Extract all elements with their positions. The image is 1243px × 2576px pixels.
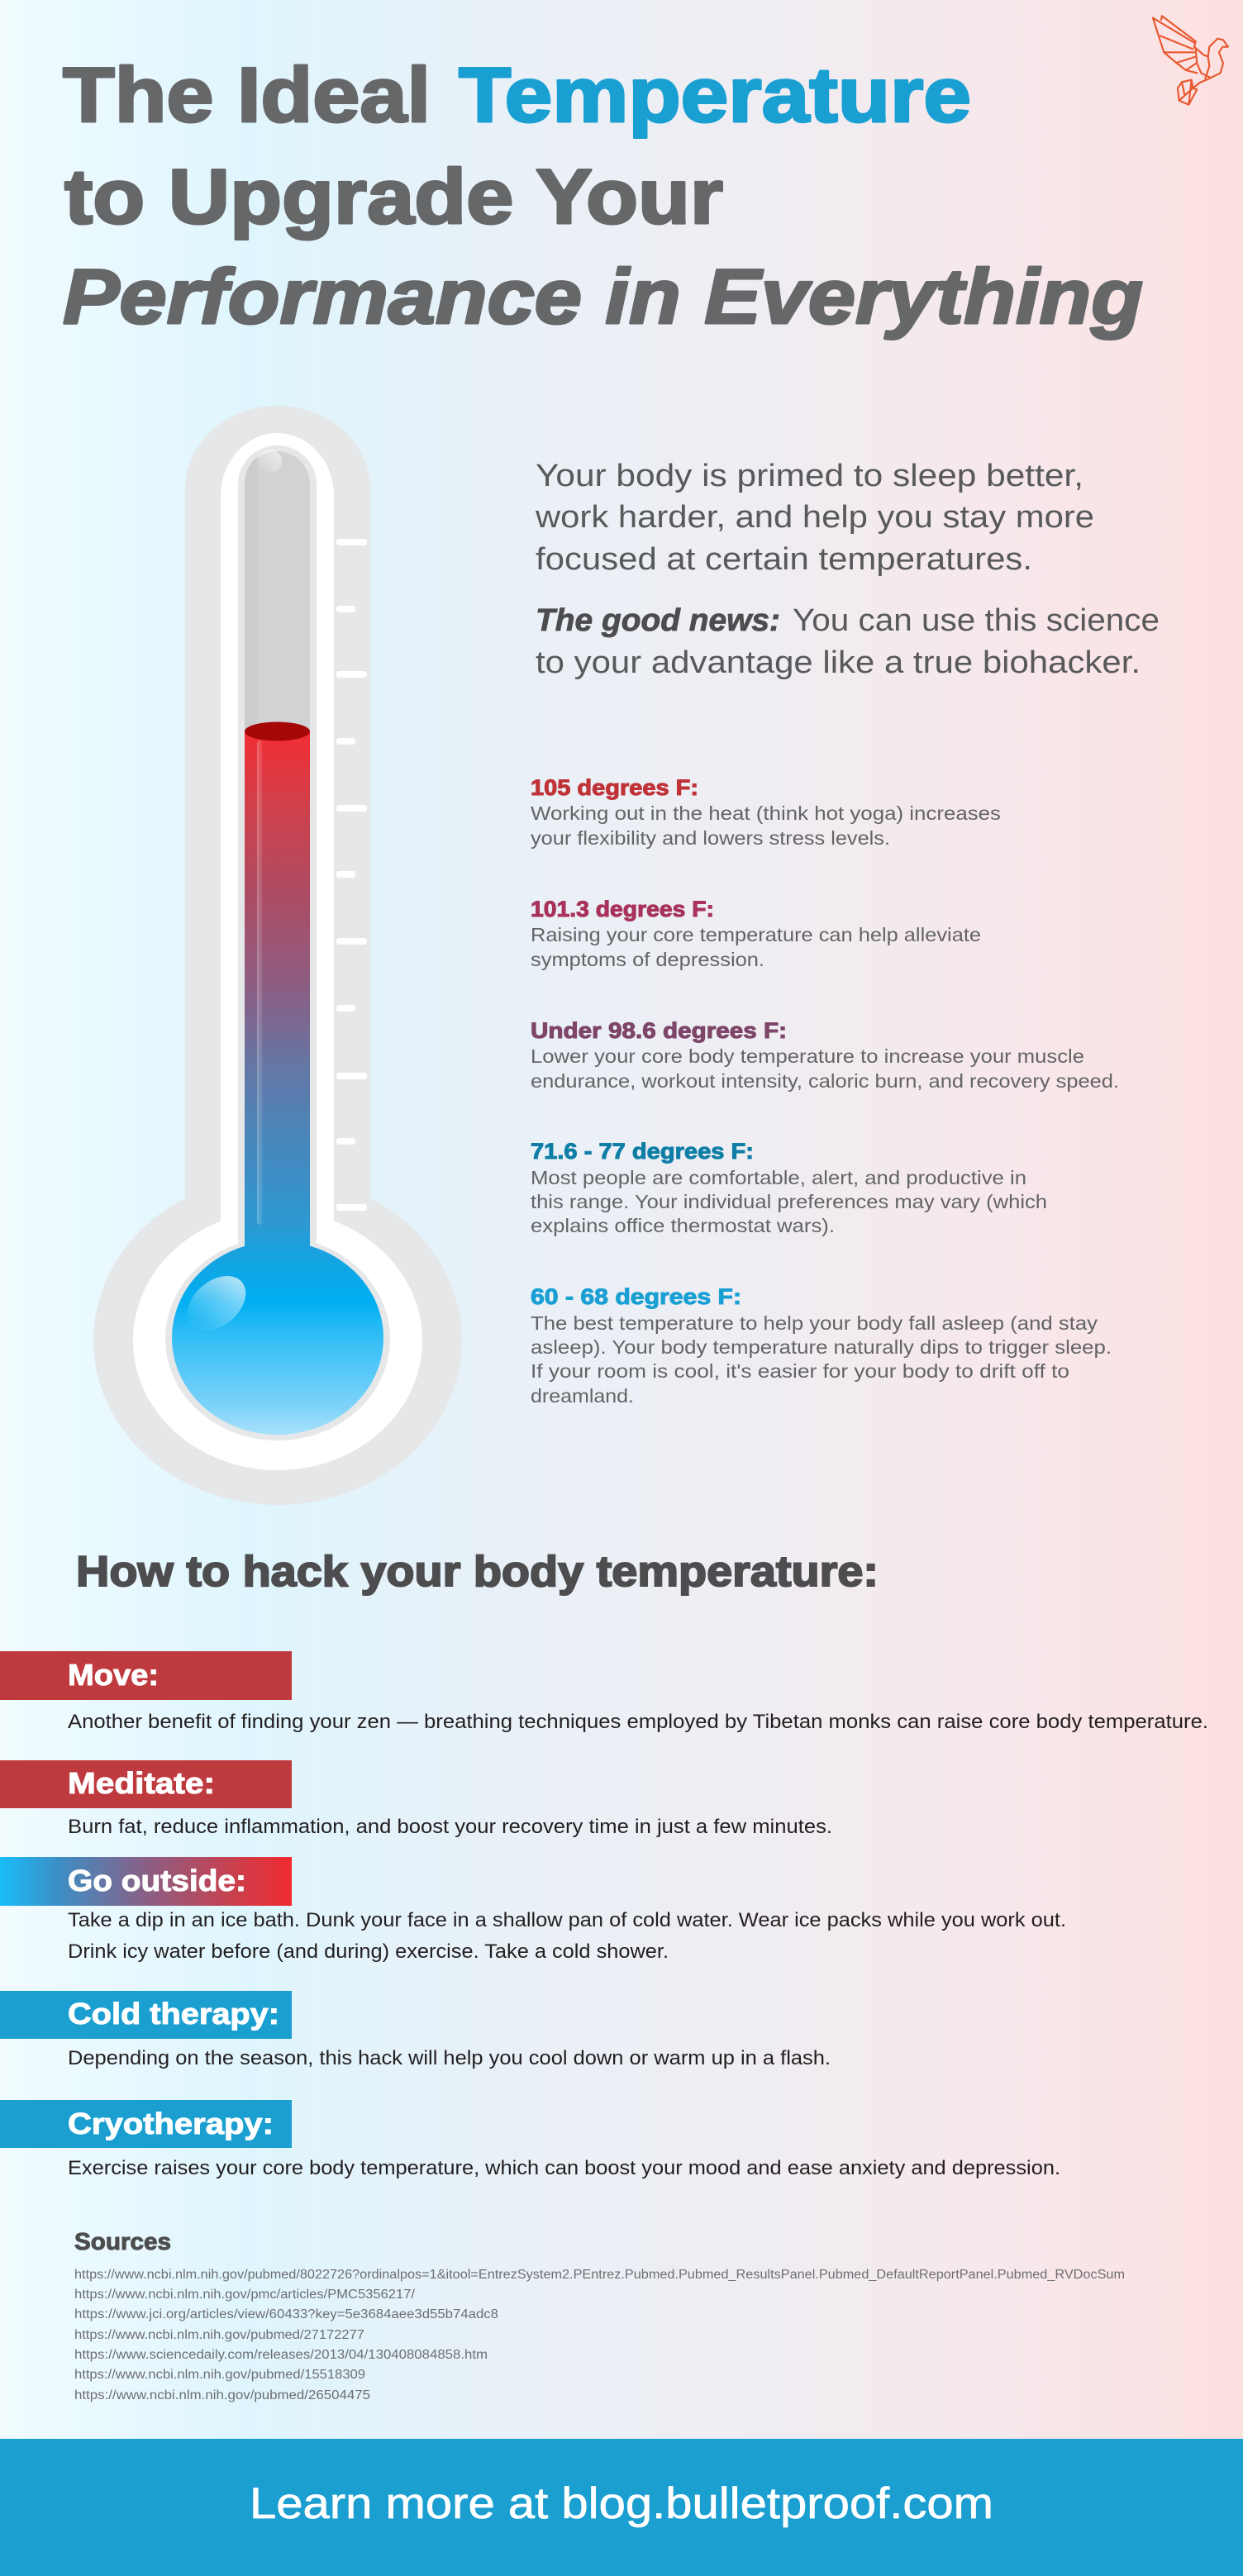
temperature entry: 105 degrees: [531, 775, 1001, 849]
title: The Ideal: [63, 51, 431, 138]
hack: meditate: [0, 1760, 832, 1838]
source links: https://www.sciencedaily.com/releases/2013/04/130408084858.htm: [74, 2348, 488, 2362]
temperature entry: 60 to 68 degrees: The best temperature to help your body fall asleep (and stay: [531, 1312, 1098, 1334]
label bar: [0, 2100, 292, 2148]
temperature entry: 60 to 68 degrees: If your room is cool, it's easier for your body to drift off to: [531, 1360, 1069, 1382]
bar label: Cryotherapy:: [68, 2107, 274, 2140]
temperature entry: 101.3 degrees: [531, 897, 981, 970]
intro text: work harder, and help you stay more: [535, 500, 1094, 535]
source links: https://www.ncbi.nlm.nih.gov/pubmed/26504475: [74, 2388, 370, 2402]
temperature entry: 71.6 to 77 degrees: 71.6 - 77 degrees F:: [531, 1139, 754, 1164]
temperature entry: 60 to 68 degrees: dreamland.: [531, 1385, 634, 1407]
hack: cold therapy: [0, 1991, 831, 2069]
glass reflection strip: [245, 457, 257, 736]
sources heading: Sources: [74, 2229, 171, 2255]
temperature entry: under 98.6 degrees: [531, 1018, 1119, 1092]
description: [68, 1909, 1066, 1963]
temperature entry: 60 to 68 degrees: [531, 1284, 1112, 1407]
intro text: [535, 459, 1160, 680]
title: Temperature: [459, 51, 971, 138]
outer grey casing: [93, 406, 462, 1505]
temperature entry: 71.6 to 77 degrees: this range. Your individual preferences may vary (which: [531, 1191, 1047, 1212]
gloss spot at tube top: [259, 450, 282, 473]
bar label: Move:: [68, 1658, 159, 1692]
hack: move: [0, 1651, 1208, 1733]
temperature entry: 105 degrees: your flexibility and lowers stress levels.: [531, 827, 890, 849]
source links: https://www.ncbi.nlm.nih.gov/pubmed/27172277: [74, 2328, 364, 2342]
description: Another benefit of finding your zen — breathing techniques employed by Tibetan monks can raise core body temperature.: [68, 1711, 1208, 1733]
thermometer: [93, 406, 462, 1505]
footer banner: [0, 2439, 1243, 2576]
source links: https://www.ncbi.nlm.nih.gov/pmc/articles/PMC5356217/: [74, 2288, 416, 2302]
tube and bulb rim: [165, 445, 390, 1440]
liquid column and bulb: [172, 731, 383, 1435]
liquid reflection strip: [257, 740, 264, 1225]
intro text: focused at certain temperatures.: [536, 542, 1032, 577]
title: Performance in Everything: [63, 253, 1143, 340]
label bar: [0, 1651, 292, 1700]
bulb glare: [177, 1265, 256, 1341]
temperature entry: 60 to 68 degrees: 60 - 68 degrees F:: [531, 1284, 741, 1309]
intro text: The good news:: [536, 603, 780, 638]
description: Burn fat, reduce inflammation, and boost your recovery time in just a few minutes.: [68, 1816, 832, 1838]
hack: cryotherapy: [0, 2100, 1060, 2179]
temperature entry: 105 degrees: 105 degrees F:: [531, 775, 698, 800]
temperature entry: under 98.6 degrees: Under 98.6 degrees F:: [531, 1018, 787, 1043]
white inner casing: [133, 433, 422, 1470]
section heading: How to hack your body temperature:: [76, 1548, 879, 1596]
title: to Upgrade Your: [64, 153, 723, 240]
temperature entry: 105 degrees: Working out in the heat (think hot yoga) increases: [531, 802, 1001, 824]
temperature entry: 101.3 degrees: 101.3 degrees F:: [531, 897, 714, 921]
description: Depending on the season, this hack will help you cool down or warm up in a flash.: [68, 2047, 831, 2069]
hack: go outside: [0, 1857, 1066, 1963]
source links: https://www.jci.org/articles/view/60433?key=5e3684aee3d55b74adc8: [74, 2307, 498, 2321]
intro text: Your body is primed to sleep better,: [536, 459, 1083, 493]
temperature entry: 101.3 degrees: symptoms of depression.: [531, 949, 764, 970]
temperature entry: under 98.6 degrees: endurance, workout intensity, caloric burn, and recovery speed.: [531, 1070, 1119, 1092]
temperature entry: 60 to 68 degrees: asleep). Your body temperature naturally dips to trigger sleep.: [531, 1336, 1112, 1358]
footer background: [0, 2439, 1243, 2576]
source links: [74, 2268, 1125, 2402]
intro text: You can use this science: [793, 603, 1160, 638]
description: Take a dip in an ice bath. Dunk your face in a shallow pan of cold water. Wear ice packs while you work out.: [68, 1909, 1066, 1931]
source links: https://www.ncbi.nlm.nih.gov/pubmed/8022726?ordinalpos=1&itool=EntrezSystem2.PEntrez.Pubmed.Pubmed_ResultsPanel.Pubmed_DefaultReportPanel.Pubmed_RVDocSum: [74, 2268, 1125, 2282]
bar label: Meditate:: [68, 1766, 215, 1800]
empty glass tube: [245, 451, 310, 736]
label bar: [0, 1760, 292, 1808]
scale ticks: [336, 539, 367, 1211]
source links: https://www.ncbi.nlm.nih.gov/pubmed/15518309: [74, 2368, 365, 2382]
footer call to action: Learn more at blog.bulletproof.com: [250, 2479, 993, 2528]
bar label: Cold therapy:: [68, 1997, 279, 2031]
temperature entry: 71.6 to 77 degrees: explains office thermostat wars).: [531, 1215, 835, 1236]
intro text: to your advantage like a true biohacker.: [536, 645, 1141, 680]
bar label: Go outside:: [68, 1864, 246, 1897]
description: Drink icy water before (and during) exercise. Take a cold shower.: [68, 1940, 669, 1963]
label bar: [0, 1857, 292, 1906]
icon: origami bird logo: [1153, 16, 1228, 105]
temperature entry: 71.6 to 77 degrees: [531, 1139, 1047, 1236]
temperature entry: 101.3 degrees: Raising your core temperature can help alleviate: [531, 924, 981, 945]
temperature entry: under 98.6 degrees: Lower your core body temperature to increase your muscle: [531, 1045, 1084, 1067]
title: [63, 51, 1143, 340]
label bar: [0, 1991, 292, 2039]
description: Exercise raises your core body temperature, which can boost your mood and ease anxiety and depression.: [68, 2157, 1060, 2179]
dark liquid surface: [245, 722, 310, 740]
sources: [74, 2229, 1125, 2402]
temperature entry: 71.6 to 77 degrees: Most people are comfortable, alert, and productive in: [531, 1167, 1026, 1188]
